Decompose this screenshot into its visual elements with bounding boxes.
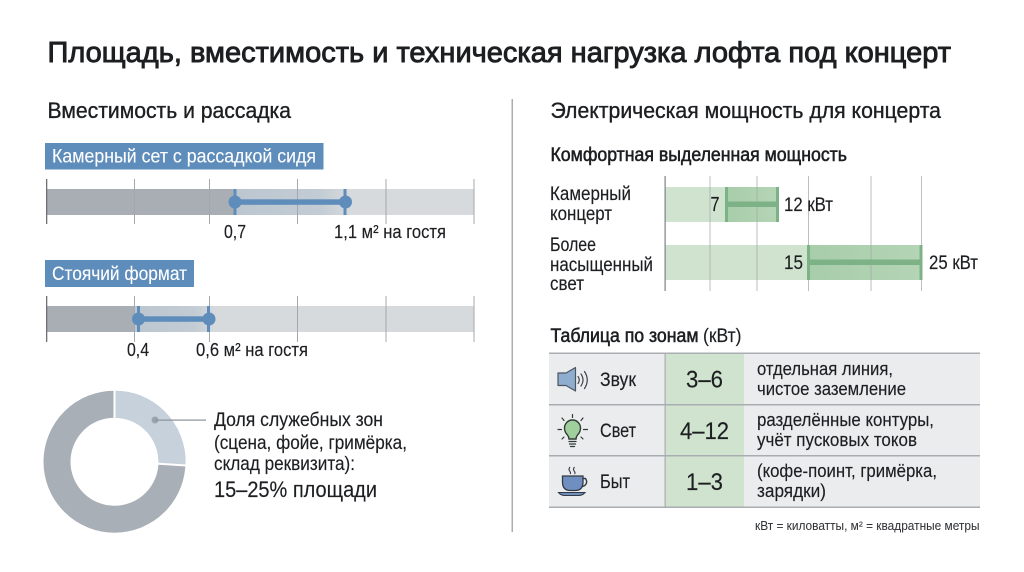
label: standing format: Стоячий формат <box>52 264 187 285</box>
subheading: table by zones: Таблица по зонам <box>550 326 698 347</box>
note: household <box>757 460 937 501</box>
icon: coffee cup <box>558 467 587 496</box>
range: 4–12: 4–12 <box>680 418 729 445</box>
heading: electrical power: Электрическая мощность для концерта <box>550 98 942 123</box>
row: light <box>558 409 934 450</box>
subheading: table by zones: (кВт) <box>703 326 742 347</box>
icon: speaker <box>558 368 587 391</box>
zone name: household: Быт <box>600 472 630 493</box>
donut chart: service zones share <box>57 388 206 519</box>
title: Площадь, вместимость и техническая нагрузка лофта под концерт <box>48 37 951 69</box>
note: sound: отдельная линия, <box>757 358 893 379</box>
note: household: (кофе-поинт, гримёрка, <box>757 460 937 481</box>
row labels: power chart: Более <box>550 235 596 256</box>
value: 0.6 m2 per guest: 0,6 м² на гостя <box>196 339 308 360</box>
bar chart: power ranges <box>664 176 922 291</box>
vertical divider between panels <box>512 99 513 532</box>
text: service zones caption: (сцена, фойе, гримёрка, <box>214 432 407 454</box>
row labels: power chart: Камерный <box>550 184 631 205</box>
table: zones <box>549 352 980 508</box>
text: service zones caption: склад реквизита): <box>214 453 355 475</box>
value: 0.7: 0,7 <box>224 221 246 242</box>
label: seated set: Камерный сет с рассадкой сидя <box>52 146 316 168</box>
row labels: power chart <box>550 184 653 295</box>
footnote: units: кВт = киловатты, м² = квадратные метры <box>755 519 980 533</box>
row labels: power chart: концерт <box>550 204 612 225</box>
value: 7: 7 <box>710 194 720 216</box>
row: sound <box>558 358 906 399</box>
row labels: power chart: свет <box>550 274 584 295</box>
note: sound <box>757 358 906 399</box>
heading: capacity and seating: Вместимость и рассадка <box>48 98 292 123</box>
row: household <box>558 460 937 501</box>
value: 15: 15 <box>784 252 803 274</box>
row labels: power chart: насыщенный <box>550 255 653 276</box>
note: light <box>757 409 934 450</box>
text: service zones caption: Доля служебных зон <box>214 409 383 431</box>
value: 12 kW: 12 кВт <box>784 194 833 216</box>
panel: electrical power <box>549 98 980 533</box>
panel: capacity and seating <box>45 98 474 519</box>
value: 25 kW: 25 кВт <box>929 252 978 274</box>
icon: light bulb <box>558 414 588 446</box>
note: light: учёт пусковых токов <box>757 429 917 450</box>
text: service zones caption: 15–25% площади <box>214 477 377 502</box>
zone name: sound: Звук <box>600 370 637 391</box>
zone name: light: Свет <box>600 421 636 442</box>
range: 3–6: 3–6 <box>686 366 723 394</box>
value: 0.4: 0,4 <box>127 339 149 360</box>
value: 1.1 m2 per guest: 1,1 м² на гостя <box>334 221 446 242</box>
subheading: comfortable dedicated power: Комфортная выделенная мощность <box>550 145 847 166</box>
note: light: разделённые контуры, <box>757 409 934 430</box>
range: 1–3: 1–3 <box>686 469 723 496</box>
text: service zones caption <box>214 409 407 502</box>
range bar: standing 0.4–0.6 <box>46 296 474 342</box>
range bar: seated 0.7–1.1 <box>46 179 474 224</box>
note: sound: чистое заземление <box>757 378 906 399</box>
note: household: зарядки) <box>757 480 826 501</box>
